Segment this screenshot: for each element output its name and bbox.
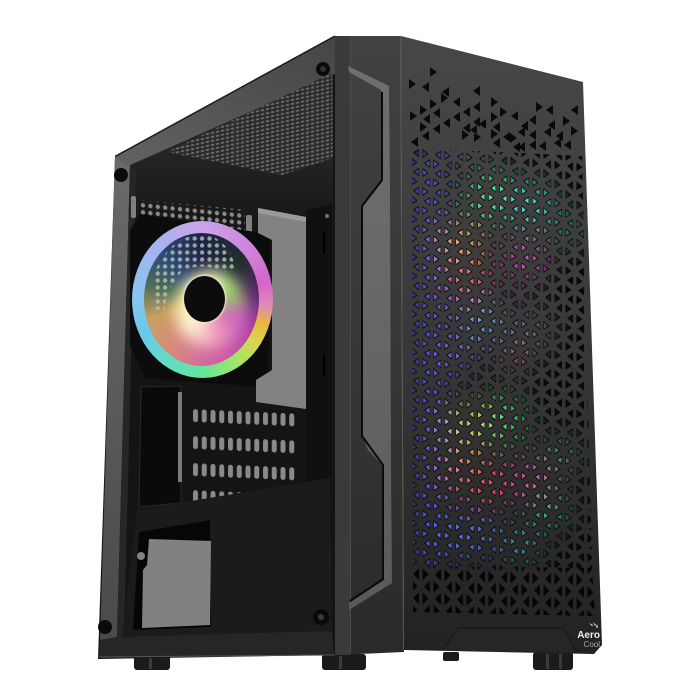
plinth xyxy=(443,628,577,652)
bottom psu shroud xyxy=(122,478,332,637)
fan hub xyxy=(184,276,225,322)
fan frame xyxy=(130,214,270,388)
scattered top perforations xyxy=(409,67,578,152)
psu window xyxy=(133,520,211,630)
rgb fan xyxy=(132,221,273,378)
motherboard tray slot xyxy=(131,196,136,218)
fan outer ring xyxy=(132,221,273,378)
top vent holes xyxy=(140,200,245,235)
fan centre glow xyxy=(175,270,247,348)
aerocool logo: Cool xyxy=(584,640,600,649)
dense triangle perforations xyxy=(412,148,592,568)
upper interior xyxy=(124,75,333,250)
front side frame xyxy=(335,36,404,655)
aerocool logo: Aero xyxy=(577,630,600,641)
screws xyxy=(98,62,330,634)
fan grille dots xyxy=(152,236,234,310)
front mesh panel xyxy=(401,36,602,654)
bottom glass strip xyxy=(99,631,334,658)
vent slots xyxy=(192,405,295,505)
fan blades disc xyxy=(144,233,259,366)
glass top band xyxy=(115,36,335,166)
accent strip xyxy=(348,66,392,610)
logo swoosh icon xyxy=(589,622,598,628)
psu grey xyxy=(142,539,211,628)
interior left strip xyxy=(117,165,136,637)
top mesh xyxy=(167,73,333,175)
aerocool logo xyxy=(577,622,600,649)
right interior column xyxy=(306,205,332,482)
feet xyxy=(134,652,573,670)
hdd cage xyxy=(139,386,181,507)
accent shadow edge xyxy=(350,92,383,601)
pc case illustration xyxy=(98,35,602,670)
rgb fan glow through mesh xyxy=(412,113,588,570)
glass frame strip xyxy=(100,157,130,640)
side glass panel xyxy=(98,36,335,659)
lower perforations xyxy=(413,566,595,616)
grey rear plate xyxy=(256,208,306,409)
